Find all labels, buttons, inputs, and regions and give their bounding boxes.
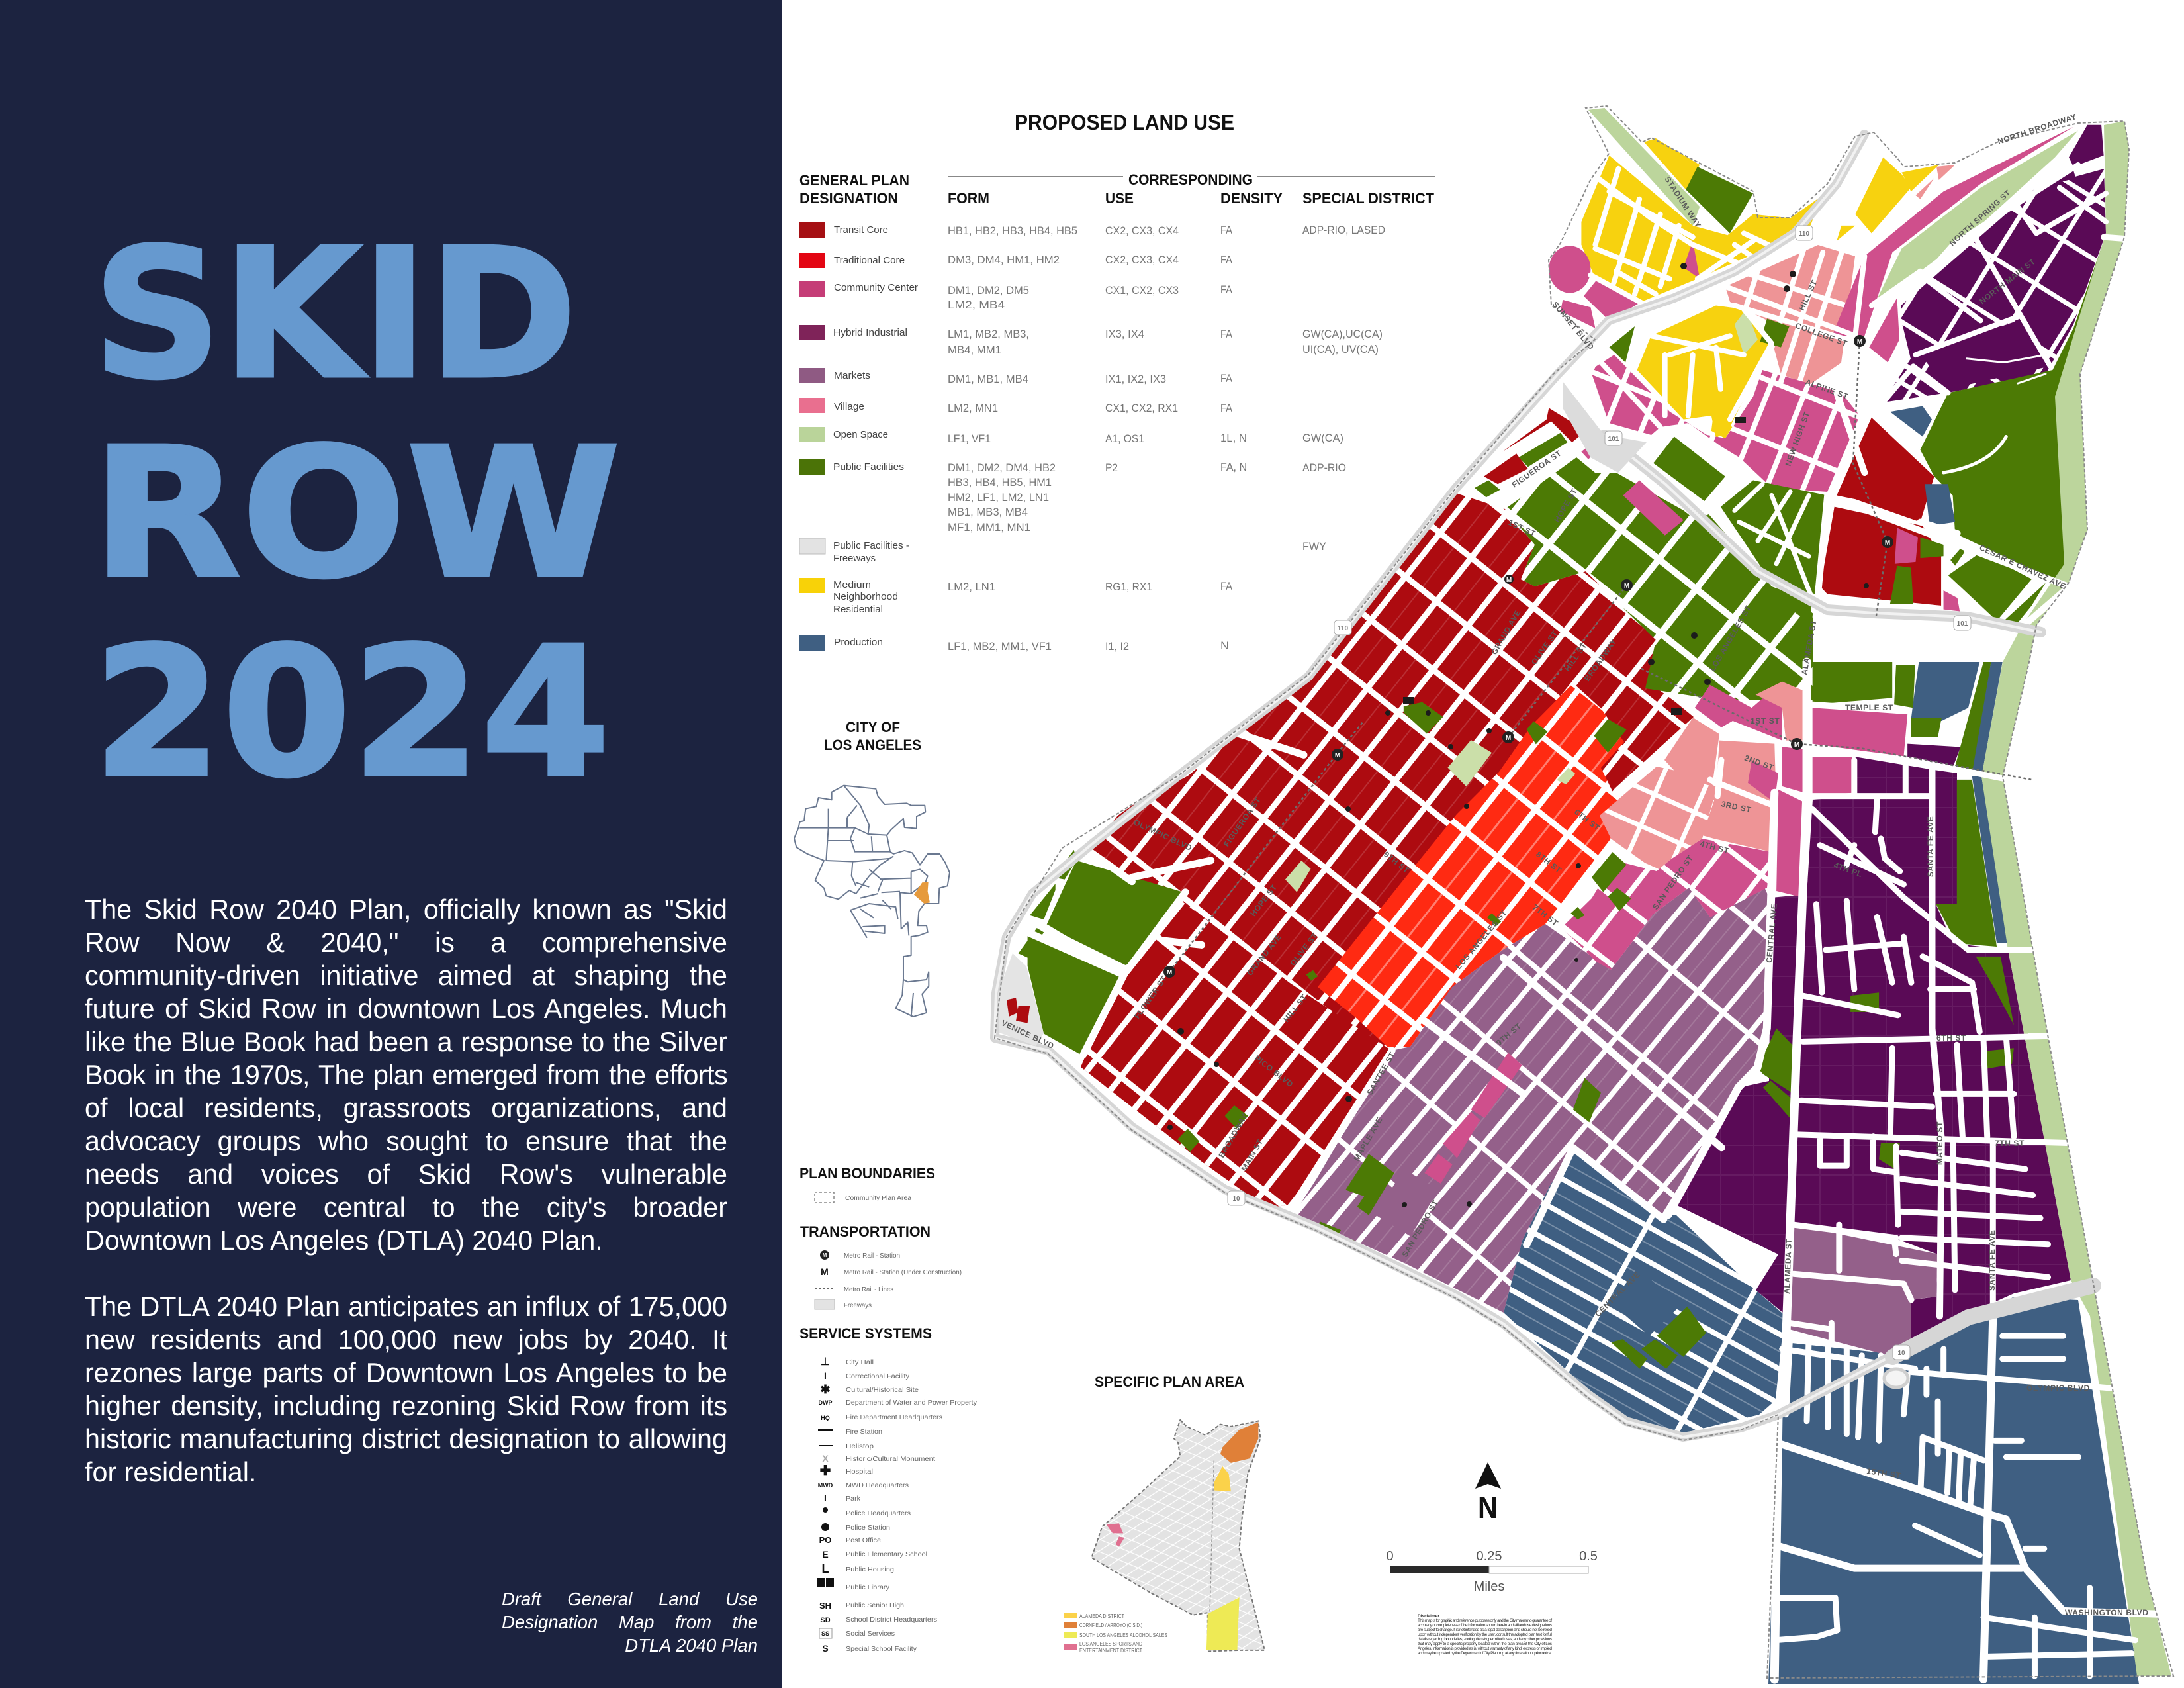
service system names: Public Senior High: [846, 1602, 904, 1609]
scale bar: 0.5: [1579, 1549, 1598, 1564]
street labels: 6TH ST: [1936, 1033, 1966, 1043]
legend density column: FA: [1220, 283, 1233, 296]
street labels: 1ST ST: [1751, 716, 1780, 726]
zone: River, park, and industrial north-east: [1475, 125, 2104, 625]
legend designation names: Freeways: [833, 553, 876, 564]
street labels: CENTRAL AVE: [1593, 1270, 1642, 1319]
street labels: MATEO ST: [1935, 1121, 1944, 1165]
street labels: SAN PEDRO ST: [1651, 853, 1695, 912]
text block: map disclaimer: [1418, 1614, 1553, 1656]
legend use column: [1105, 224, 1179, 653]
street labels: 4TH ST: [1699, 839, 1730, 856]
text block: plan description: needs and voices of Skid Row's vulnerable: [85, 1159, 727, 1190]
street labels: MAIN ST: [1239, 1137, 1265, 1173]
service system names: Fire Station: [846, 1429, 882, 1436]
street labels: SANTA FE AVE: [1926, 816, 1935, 877]
freeway: 110 and 10 casing: [995, 134, 2093, 1437]
legend use column: CX1, CX2, RX1: [1105, 402, 1178, 414]
freeway: 101 lane line: [1604, 435, 2041, 632]
metro station markers: M: [1624, 583, 1629, 590]
legend: transportation: Metro Rail - Station: [844, 1252, 900, 1260]
zone: Central City green and light-green parcels: [1019, 702, 1631, 1243]
scale bar: 0: [1386, 1549, 1394, 1564]
service system icons: I: [824, 1370, 827, 1381]
heading: proposed land use: PROPOSED LAND USE: [1015, 111, 1234, 134]
legend special district column: GW(CA),UC(CA): [1302, 328, 1383, 340]
legend designation names: Traditional Core: [834, 255, 905, 266]
legend form column: DM3, DM4, HM1, HM2: [948, 254, 1060, 266]
legend form column: HM2, LF1, LM2, LN1: [948, 491, 1049, 504]
street labels: NORTH SPRING ST: [1948, 188, 2013, 248]
street labels: FIGUEROA ST: [1222, 795, 1263, 849]
text block: plan description: The Skid Row 2040 Plan, officially known as "Skid: [85, 894, 727, 925]
service system icons: ✱: [820, 1383, 831, 1396]
street labels: NEW HIGH ST: [1784, 410, 1811, 467]
legend: service systems: SERVICE SYSTEMS: [799, 1325, 932, 1342]
street labels: 9TH ST: [1382, 849, 1411, 875]
text block: plan description: new residents and 100,000 new jobs by 2040. It: [85, 1325, 727, 1355]
title: Skid Row 2024: [91, 210, 621, 817]
service system icons: SS: [821, 1630, 829, 1637]
service system icons: SD: [820, 1617, 831, 1624]
text block: map disclaimer: details regarding boundaries, zoning, density, permitted uses, and any other provisions: [1418, 1637, 1553, 1642]
text block: plan description: population were central to the city's broader: [85, 1192, 727, 1223]
service system names: Public Elementary School: [846, 1551, 927, 1558]
metro station markers: M: [1885, 539, 1890, 547]
freeway: Santa Fe interchange ring: [1884, 1369, 1908, 1387]
legend density column: FA: [1220, 402, 1233, 414]
freeway shields: [1228, 226, 1971, 1360]
legend form column: LM1, MB2, MB3,: [948, 328, 1029, 340]
metro station markers: M: [1857, 338, 1862, 346]
service system icons: MWD: [818, 1482, 833, 1489]
legend header: DENSITY: [1220, 190, 1283, 207]
zone: Production west: [1504, 1148, 1790, 1433]
service system names: Hospital: [846, 1468, 873, 1476]
legend density column: N: [1220, 639, 1229, 652]
legend designation names: Public Facilities -: [833, 540, 909, 551]
zone: Production east: [1768, 1297, 2139, 1684]
street labels: HILL ST: [1563, 641, 1589, 673]
street labels: SANTEE ST: [1365, 1050, 1397, 1096]
street labels: VENICE BLVD: [1000, 1018, 1056, 1051]
locator heading: city of Los Angeles: LOS ANGELES: [824, 737, 921, 753]
text block: plan description: Row Now & 2040," is a comprehensive: [85, 927, 727, 958]
legend: transportation: M: [823, 1252, 827, 1258]
legend swatches: [799, 222, 825, 651]
service system icons: PO: [819, 1535, 831, 1545]
map: proposed land use zones: [995, 106, 2173, 1684]
legend density column: [1220, 224, 1247, 652]
zone: Village salmon blocks: [1600, 767, 1774, 871]
service system names: Historic/Cultural Monument: [846, 1456, 935, 1463]
street labels: 6TH ST: [1572, 807, 1602, 833]
service system names: Post Office: [846, 1537, 881, 1544]
street labels: LOS ANGELES ST: [1707, 604, 1753, 673]
legend header: SPECIAL DISTRICT: [1302, 190, 1435, 207]
legend use column: RG1, RX1: [1105, 581, 1152, 593]
street labels: STADIUM WAY: [1662, 175, 1703, 230]
zone: Transit Core south of freeway: [1081, 493, 1694, 1208]
street labels: NORTH BROADWAY: [1997, 112, 2077, 146]
street labels: 8TH ST: [1534, 849, 1563, 875]
street labels: PICO BLVD: [1253, 1053, 1295, 1089]
streets: north area: [1590, 165, 2129, 623]
title: Skid Row 2024: 2024: [93, 608, 610, 817]
street labels: COLLEGE ST: [1794, 321, 1849, 348]
street labels: ALAMEDA ST: [1782, 1238, 1794, 1294]
legend designation names: Transit Core: [834, 224, 888, 236]
text block: plan description: of local residents, grassroots organizations, and: [85, 1093, 727, 1123]
legend designation names: Markets: [834, 370, 870, 381]
legend use column: P2: [1105, 461, 1118, 474]
locator heading: city of Los Angeles: CITY OF: [846, 719, 900, 735]
caption: map source: [502, 1589, 758, 1656]
title: Skid Row 2024: SKID: [93, 210, 577, 418]
legend form column: LF1, MB2, MM1, VF1: [948, 640, 1052, 653]
legend form column: LF1, VF1: [948, 432, 991, 445]
legend density column: 1L, N: [1220, 432, 1247, 444]
zone: Civic Center public facilities: [1505, 457, 1813, 700]
street labels: SANTA FE AVE: [1987, 1229, 1997, 1291]
freeway shields: 101: [1957, 620, 1968, 628]
street labels: 4TH PL: [1833, 861, 1864, 879]
street labels: SUNSET BLVD: [1551, 300, 1596, 352]
zone: Hybrid Industrial north: [1883, 169, 2106, 402]
service system names: [846, 1359, 977, 1653]
service system icons: E: [822, 1549, 829, 1560]
metro rail lines: [1169, 341, 2032, 972]
text block: plan description: like the Blue Book had been a response to the Silver: [85, 1027, 727, 1057]
legend designation names: Village: [834, 401, 864, 412]
icon: north arrow: [1475, 1462, 1501, 1524]
scale bar: 0.25: [1477, 1549, 1502, 1564]
legend: plan boundaries: PLAN BOUNDARIES: [799, 1165, 935, 1182]
service system icons: DWP: [818, 1399, 833, 1406]
text block: plan description: rezones large parts of Downtown Los Angeles to be: [85, 1358, 727, 1388]
zone: NW neighborhoods and park: [1549, 108, 1955, 328]
legend: transportation: Metro Rail - Lines: [844, 1286, 893, 1293]
service system names: Correctional Facility: [846, 1373, 909, 1380]
service system names: MWD Headquarters: [846, 1482, 909, 1489]
street labels: HOPE ST: [1552, 487, 1579, 524]
locator heading: city of Los Angeles: [824, 719, 921, 753]
street labels: FIGUEROA ST: [1510, 448, 1563, 489]
legend header: CORRESPONDING: [1128, 171, 1253, 188]
freeway: south-west interchange: [998, 953, 1044, 1046]
caption: map source: DTLA 2040 Plan: [625, 1635, 758, 1656]
legend form column: [948, 224, 1077, 653]
street labels: 2ND ST: [1743, 753, 1775, 773]
street labels: HILL ST: [1281, 992, 1309, 1024]
legend density column: FA: [1220, 580, 1233, 592]
legend form column: LM2, MB4: [948, 299, 1005, 311]
freeway shields: 10: [1232, 1196, 1240, 1203]
street labels: NORTH MAIN ST: [1978, 257, 2037, 306]
service system icons: L: [822, 1562, 829, 1575]
metro station markers: M: [1167, 969, 1172, 976]
caption: map source: Designation Map from the: [502, 1612, 758, 1632]
zone: Community Center around Little Tokyo: [1561, 839, 1771, 970]
service system icons: [817, 1356, 834, 1654]
zone: Community Center north: [1590, 355, 1860, 492]
caption: map source: Draft General Land Use: [502, 1589, 758, 1609]
street labels: 3RD ST: [1720, 799, 1752, 815]
freeway: 10 east upper deck: [1893, 1286, 2093, 1357]
metro station markers: [1163, 335, 1893, 978]
legend form column: LM2, MN1: [948, 402, 998, 414]
legend density column: FA: [1220, 328, 1233, 340]
street labels: OLYMPIC BLVD: [2026, 1383, 2090, 1393]
zone: LA River greenway: [1981, 121, 2171, 1676]
legend: general plan designation table: [799, 171, 1435, 653]
service system names: Park: [846, 1495, 861, 1503]
legend: transportation: Metro Rail - Station (Under Construction): [844, 1269, 962, 1276]
zone: Markets: [1295, 884, 1769, 1313]
legend header: FORM: [948, 190, 989, 207]
street labels: WASHINGTON BLVD: [2065, 1608, 2149, 1617]
legend header: DESIGNATION: [799, 190, 898, 207]
freeways: [995, 134, 2093, 1437]
freeway: 101 casing: [1604, 435, 2041, 632]
street labels: OLYMPIC BLVD: [1132, 818, 1194, 853]
text block: map disclaimer: Disclaimer: [1418, 1614, 1439, 1618]
legend designation names: Community Center: [834, 282, 918, 293]
street labels: MAPLE AVE: [1351, 1115, 1385, 1162]
legend: transportation: Freeways: [844, 1302, 872, 1309]
legend: transportation: TRANSPORTATION: [800, 1223, 931, 1240]
text block: plan description: future of Skid Row in downtown Los Angeles. Much: [85, 994, 727, 1024]
locator map: city of Los Angeles: [794, 786, 950, 1017]
legend: transportation: M: [821, 1266, 829, 1277]
zone: Transit Core blocks at Venice interchange: [1007, 998, 1030, 1023]
icon: north arrow: N: [1478, 1490, 1498, 1524]
scale bar: Miles: [1474, 1579, 1504, 1594]
text block: plan description: advocacy groups who sought to ensure that the: [85, 1126, 727, 1156]
text block: map disclaimer: upon without independent verification by the user, consult the adopted plan text for full: [1418, 1632, 1553, 1637]
zone: Markets south-east: [1790, 1225, 1938, 1356]
zone: Village north of 101: [1725, 245, 1855, 385]
inset legend: specific plan districts: SOUTH LOS ANGELES ALCOHOL SALES: [1079, 1632, 1167, 1638]
legend use column: IX3, IX4: [1105, 328, 1144, 340]
street labels: OLIVE ST: [1288, 931, 1320, 968]
street labels: LOS ANGELES ST: [1454, 908, 1509, 971]
text block: plan description: Downtown Los Angeles (DTLA) 2040 Plan.: [85, 1225, 603, 1256]
zone: Village block north: [1664, 718, 1719, 786]
legend form column: MF1, MM1, MN1: [948, 521, 1030, 534]
legend special district column: [1302, 224, 1385, 553]
zone: Transit Core narrow southern blocks: [1081, 898, 1392, 1208]
legend form column: HB1, HB2, HB3, HB4, HB5: [948, 224, 1077, 237]
inset legend: specific plan districts: ALAMEDA DISTRICT: [1079, 1613, 1124, 1619]
street labels: 9TH ST: [1494, 1021, 1523, 1047]
service system icons: ✚: [820, 1464, 831, 1478]
service facility symbols on map: [1167, 263, 1869, 1207]
metro station markers: M: [1506, 577, 1512, 584]
street labels: GRAND AVE: [1245, 932, 1283, 978]
legend designation names: Neighborhood: [833, 591, 898, 602]
text block: map disclaimer: that may apply to a specific property located within the plan area of the City of Los: [1418, 1642, 1553, 1646]
legend designation names: Medium: [833, 579, 871, 590]
legend designation names: Production: [834, 637, 883, 648]
street labels: BROADWAY: [1216, 1112, 1250, 1160]
street labels: HILL ST: [1797, 279, 1819, 312]
text block: plan description: community-driven initiative aimed at shaping the: [85, 961, 727, 991]
inset legend: specific plan districts: LOS ANGELES SPORTS AND: [1079, 1641, 1142, 1647]
street labels: OLIVE ST: [1529, 629, 1560, 667]
metro station markers: M: [1506, 735, 1511, 742]
legend header: USE: [1105, 190, 1134, 207]
legend designation names: Hybrid Industrial: [833, 327, 907, 338]
inset legend: specific plan districts: ENTERTAINMENT DISTRICT: [1079, 1648, 1142, 1654]
service system names: Helistop: [846, 1443, 874, 1450]
legend use column: CX1, CX2, CX3: [1105, 284, 1179, 297]
freeway shields: 101: [1608, 436, 1619, 443]
legend: plan boundaries: [799, 1165, 935, 1203]
inset legend: specific plan districts: [1064, 1613, 1167, 1654]
street labels: 7TH ST: [1995, 1139, 2025, 1148]
text block: plan description: The DTLA 2040 Plan anticipates an influx of 175,000: [85, 1291, 727, 1322]
legend header: [799, 171, 1435, 207]
text block: map disclaimer: and may be updated by the Department of City Planning at any time without prior notice.: [1418, 1651, 1552, 1656]
panel: left navy sidebar: [0, 0, 782, 1688]
legend density column: FA: [1220, 254, 1233, 266]
text block: map disclaimer: accuracy or completeness of the information shown herein and all land use designations: [1418, 1623, 1553, 1628]
legend form column: DM1, MB1, MB4: [948, 373, 1028, 385]
freeway shields: 110: [1338, 625, 1349, 632]
legend form column: DM1, DM2, DM4, HB2: [948, 461, 1056, 474]
legend special district column: ADP-RIO, LASED: [1302, 224, 1385, 236]
legend: transportation: [800, 1223, 962, 1309]
zone: flat blocks around Arts District: [1611, 662, 2014, 1369]
street labels: GRAND AVE: [1489, 608, 1523, 657]
text block: map disclaimer: This map is for graphic and reference purposes only and the City makes no guarantee of: [1418, 1618, 1552, 1623]
zone: Hybrid Industrial south: [1676, 757, 2071, 1339]
service system names: Cultural/Historical Site: [846, 1387, 919, 1394]
street labels: 7TH ST: [1531, 902, 1560, 928]
service system icons: SH: [819, 1601, 831, 1611]
legend use column: IX1, IX2, IX3: [1105, 373, 1166, 385]
zone: Chinatown and hillside residential: [1609, 305, 1790, 438]
legend form column: DM1, DM2, DM5: [948, 284, 1029, 297]
legend designation names: Residential: [833, 604, 883, 615]
street labels: SAN PEDRO ST: [1400, 1198, 1440, 1259]
legend form column: LM2, LN1: [948, 581, 995, 593]
scale bar: [1386, 1549, 1598, 1594]
legend designation names: Open Space: [833, 429, 888, 440]
freeway: 110 and 10 lane line: [995, 134, 2093, 1437]
legend designation names: [833, 224, 918, 648]
text block: map disclaimer: Angeles. Information is provided as is, without warranty of any kind, express or implied: [1418, 1646, 1552, 1651]
service system names: City Hall: [846, 1359, 874, 1366]
street labels: TEMPLE ST: [1845, 703, 1893, 712]
streets: east industrial and production: [1668, 662, 2158, 1679]
service system names: Public Library: [846, 1584, 889, 1591]
service system icons: S: [822, 1643, 829, 1654]
map boundary: dashed community plan outline: [995, 106, 2173, 1678]
street labels: ALAMEDA ST: [1799, 619, 1819, 676]
service system icons: X: [822, 1453, 829, 1464]
metro station markers: M: [1794, 741, 1799, 749]
legend density column: FA, N: [1220, 461, 1247, 473]
street labels: 1ST ST: [1507, 518, 1537, 538]
text block: plan description: higher density, including rezoning Skid Row from its: [85, 1391, 727, 1421]
service system icons: HQ: [821, 1415, 830, 1421]
street labels: BROADWAY: [1582, 637, 1618, 683]
legend form column: MB1, MB3, MB4: [948, 506, 1028, 518]
legend form column: MB4, MM1: [948, 344, 1001, 356]
service system icons: I: [824, 1493, 827, 1503]
service system names: Police Station: [846, 1524, 890, 1532]
title: Skid Row 2024: ROW: [91, 409, 621, 618]
legend form column: HB3, HB4, HB5, HM1: [948, 476, 1052, 489]
street labels: CENTRAL AVE: [1764, 903, 1779, 963]
text block: plan description: Book in the 1970s, The plan emerged from the efforts: [85, 1060, 727, 1090]
street labels: ALPINE ST: [1804, 377, 1850, 401]
text block: plan description: for residential.: [85, 1457, 256, 1487]
legend designation names: Public Facilities: [833, 461, 904, 473]
street labels: [1000, 112, 2149, 1617]
service system names: School District Headquarters: [846, 1617, 937, 1624]
service system names: Fire Department Headquarters: [846, 1414, 942, 1421]
metro station markers: M: [1335, 752, 1340, 759]
heading: specific plan area: SPECIFIC PLAN AREA: [1095, 1374, 1244, 1390]
street labels: 15TH ST: [1866, 1466, 1901, 1480]
streets: central city major corridors: [1028, 733, 1721, 1244]
service system names: Public Housing: [846, 1566, 894, 1573]
legend header: GENERAL PLAN: [799, 172, 909, 189]
legend use column: CX2, CX3, CX4: [1105, 224, 1179, 237]
legend use column: CX2, CX3, CX4: [1105, 254, 1179, 266]
legend: plan boundaries: Community Plan Area: [845, 1195, 911, 1202]
street labels: HOPE ST: [1248, 882, 1279, 918]
service system icons: ⊥: [821, 1356, 830, 1368]
freeway shields: 110: [1799, 230, 1810, 238]
service system names: Department of Water and Power Property: [846, 1399, 977, 1407]
service system names: Special School Facility: [846, 1646, 917, 1653]
legend density column: FA: [1220, 224, 1233, 236]
text block: map disclaimer: are subject to change. It is not intended as a legal description and should not be relied: [1418, 1628, 1552, 1632]
legend special district column: FWY: [1302, 540, 1326, 553]
text block: plan description: historic manufacturing district designation to allowing: [85, 1424, 727, 1454]
legend use column: I1, I2: [1105, 640, 1129, 653]
service system names: Police Headquarters: [846, 1510, 911, 1517]
zone: Traditional Core: [1318, 683, 1624, 1047]
legend special district column: UI(CA), UV(CA): [1302, 343, 1379, 355]
freeway: interchange 110 and 101: [1563, 381, 1647, 473]
inset map: specific plan area: [1091, 1420, 1265, 1652]
legend use column: A1, OS1: [1105, 432, 1144, 445]
street labels: FLOWER ST: [1132, 974, 1169, 1021]
legend special district column: GW(CA): [1302, 432, 1343, 444]
legend density column: FA: [1220, 372, 1233, 385]
inset legend: specific plan districts: CORNFIELD / ARROYO (C.S.D.): [1079, 1622, 1142, 1628]
service system names: Social Services: [846, 1630, 895, 1638]
freeway shields: 10: [1897, 1350, 1905, 1357]
legend special district column: ADP-RIO: [1302, 461, 1346, 474]
legend: service systems: [799, 1325, 977, 1654]
text block: plan description: [85, 894, 727, 1487]
street labels: CESAR E CHAVEZ AVE: [1978, 543, 2068, 591]
